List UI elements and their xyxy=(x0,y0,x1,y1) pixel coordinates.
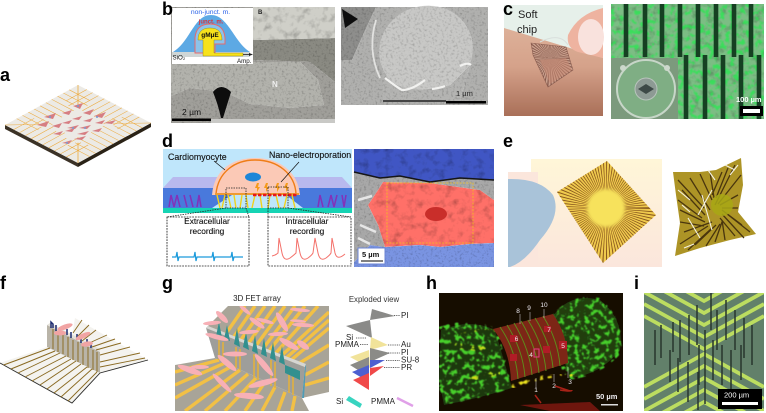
scale bar: 200 µm xyxy=(724,390,749,400)
callout leaders xyxy=(214,161,299,182)
inset: junction schematic: SiO₂ xyxy=(172,54,186,62)
PMMA strip legend xyxy=(397,398,413,406)
scale bar xyxy=(596,394,618,406)
panel letters: f xyxy=(0,273,7,293)
electrode numbers: 10 xyxy=(540,302,548,309)
panel e: flat chip on fingertip xyxy=(508,159,662,267)
box: extracellular recording: recording xyxy=(190,226,225,236)
soft chip xyxy=(530,38,573,87)
layer labels: PI xyxy=(401,348,409,357)
inset: junction schematic: Amp. xyxy=(237,58,252,65)
layer labels: Si xyxy=(346,333,353,342)
layer labels xyxy=(335,311,420,406)
panel letters: h xyxy=(426,273,437,293)
panel g: exploded view xyxy=(335,295,420,408)
chip label: chip xyxy=(517,24,537,36)
gold interconnects xyxy=(5,85,151,163)
electrode numbers: 3 xyxy=(568,379,572,386)
Si strip legend xyxy=(346,396,362,408)
inset: junction schematic xyxy=(172,8,253,65)
nano-electroporation label: Nano-electroporation xyxy=(269,150,351,160)
electrode numbers: 5 xyxy=(561,343,565,350)
layer labels: Au xyxy=(401,340,411,349)
panel letters: d xyxy=(162,131,173,151)
electrode numbers: 9 xyxy=(527,305,531,312)
panel letters xyxy=(0,0,639,293)
inset: junction schematic: junct. m. xyxy=(198,20,224,26)
panel h: fluorescence of scaffolded tissue xyxy=(439,293,623,411)
scale bar xyxy=(718,389,762,409)
panel a: planar nanoelectronic array xyxy=(5,85,151,167)
Au layer xyxy=(350,337,388,368)
panel b: TEM micrograph with inset xyxy=(171,7,335,123)
cell annotations: B xyxy=(258,10,263,16)
cardiomyocyte xyxy=(212,158,300,195)
PI top layer xyxy=(346,309,395,338)
box: intracellular recording: recording xyxy=(290,226,325,236)
nano-electrodes xyxy=(217,195,295,208)
3D FET array label: 3D FET array xyxy=(233,294,281,303)
panel d: nano-electroporation schematic xyxy=(163,149,352,266)
PI lower layer xyxy=(350,348,390,377)
panel f: 3D wall device xyxy=(0,318,148,403)
panel c: soft chip on skin photo xyxy=(504,5,604,116)
inset: packaged chip xyxy=(611,58,678,119)
cell annotations xyxy=(258,10,278,89)
PR layer xyxy=(353,366,384,390)
scale bar: 5 µm xyxy=(362,250,380,259)
needles xyxy=(655,293,752,410)
scale bar: 1 µm xyxy=(456,89,473,98)
panel b: SEM of cell xyxy=(341,0,488,107)
electrode numbers: 7 xyxy=(547,327,551,334)
inset: junction schematic: gMµE xyxy=(201,32,219,39)
cardiomyocytes xyxy=(177,304,314,400)
panel letters: g xyxy=(162,273,173,293)
scale bar: 100 µm xyxy=(736,95,762,104)
electrode numbers xyxy=(515,302,572,394)
gold traces xyxy=(4,320,145,401)
box: intracellular recording: Intracellular xyxy=(286,216,329,226)
scale bar xyxy=(446,89,486,104)
layer labels: PMMA xyxy=(335,340,360,349)
panel i: bright-field needle array xyxy=(644,293,764,411)
layer labels: PI xyxy=(401,311,409,320)
chip label xyxy=(517,9,538,36)
inset: junction schematic: non-junct. m. xyxy=(191,9,230,16)
box: extracellular recording xyxy=(167,216,249,266)
layer labels: Si xyxy=(336,397,343,406)
cells xyxy=(37,103,116,144)
layer labels: PMMA xyxy=(371,397,396,406)
cells xyxy=(54,322,93,348)
panel letters: i xyxy=(634,273,639,293)
panel g: 3D FET array xyxy=(175,304,329,411)
electrode numbers: 1 xyxy=(534,387,538,394)
panel g: exploded view: Exploded view xyxy=(349,295,400,304)
cell annotations: N xyxy=(272,80,278,89)
zoom dashed boxes xyxy=(167,187,351,217)
electrode numbers: 8 xyxy=(516,308,520,315)
panel c: fluorescence micrograph xyxy=(611,4,764,119)
cardiomyocyte label: Cardiomyocyte xyxy=(168,152,227,162)
electroporation sparks xyxy=(255,183,289,192)
radial gold chip xyxy=(557,161,656,263)
green cell clusters xyxy=(439,297,622,405)
layer labels: PR xyxy=(401,363,412,372)
box: intracellular recording xyxy=(268,216,351,266)
panel letters: a xyxy=(0,65,11,85)
box: extracellular recording: Extracellular xyxy=(184,216,230,226)
electrode numbers: 6 xyxy=(515,336,519,343)
panel letters: e xyxy=(503,131,513,151)
scale bar: 2 µm xyxy=(182,107,201,117)
scale bar xyxy=(736,95,763,116)
scale bar: 50 µm xyxy=(596,392,618,401)
red nanoelectronic scaffold xyxy=(493,314,568,381)
scale bar xyxy=(172,107,211,121)
nanowire probes xyxy=(51,322,91,348)
electrode numbers: 4 xyxy=(529,352,533,359)
FET interconnects on wall xyxy=(219,340,293,395)
purple nanowires xyxy=(169,195,346,207)
layer labels: SU-8 xyxy=(401,356,420,364)
panel e: crumpled chip xyxy=(673,158,756,256)
SU-8 layer xyxy=(352,360,385,382)
chip label: Soft xyxy=(518,9,538,21)
pore in the cell xyxy=(213,87,231,118)
FET probes xyxy=(216,322,300,380)
electrode numbers: 2 xyxy=(552,383,556,390)
panel d: false-coloured SEM xyxy=(354,149,494,267)
